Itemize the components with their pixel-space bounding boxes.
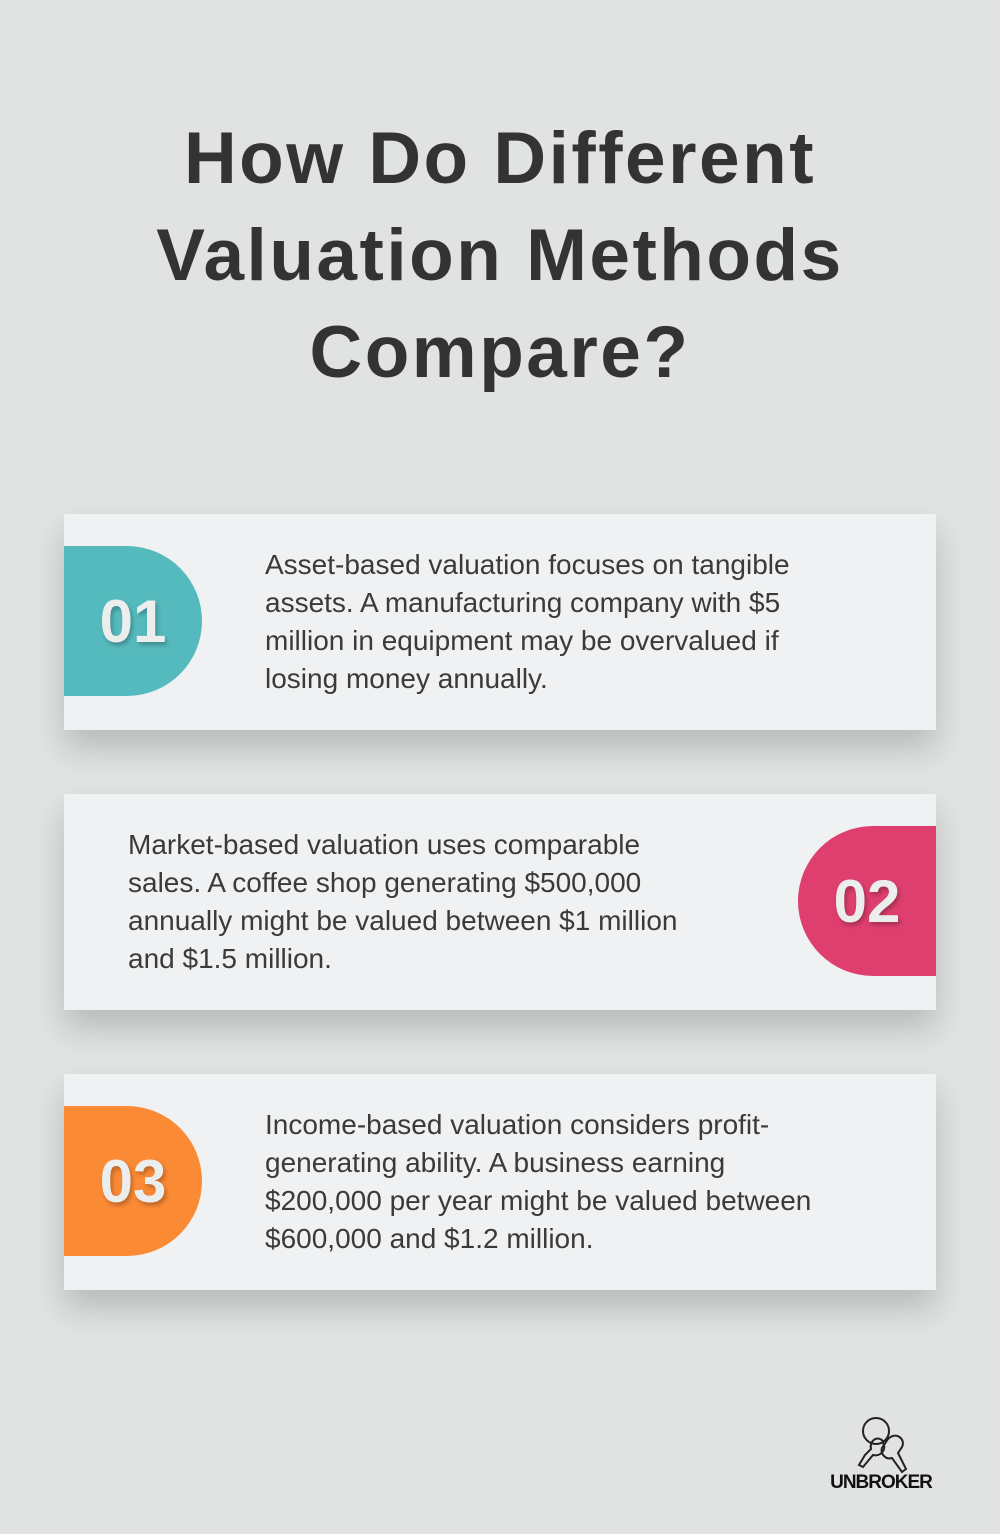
title: [156, 118, 844, 393]
icon: keys: [858, 1417, 908, 1474]
text 03: [265, 1109, 811, 1254]
badge 03: 03: [100, 1148, 166, 1214]
panel: card 02: [64, 794, 936, 1010]
panel: card 03: [64, 1074, 936, 1290]
text 01: [265, 549, 790, 694]
text 01: million in equipment may be overvalued if: [265, 625, 779, 656]
text 02: Market-based valuation uses comparable: [128, 829, 640, 860]
text 01: losing money annually.: [265, 663, 548, 694]
panel: card 01: [64, 514, 936, 730]
logo: [830, 1417, 932, 1493]
badge 01: [64, 546, 202, 696]
text 01: assets. A manufacturing company with $5: [265, 587, 780, 618]
badge 01: 01: [100, 588, 166, 654]
text 02: sales. A coffee shop generating $500,000: [128, 867, 641, 898]
text 02: and $1.5 million.: [128, 943, 332, 974]
title: Valuation Methods: [156, 215, 844, 296]
text 02: [128, 829, 677, 974]
badge 03: [64, 1106, 202, 1256]
text 03: $600,000 and $1.2 million.: [265, 1223, 593, 1254]
text 02: annually might be valued between $1 million: [128, 905, 677, 936]
text 03: Income-based valuation considers profit-: [265, 1109, 769, 1140]
text 03: $200,000 per year might be valued between: [265, 1185, 811, 1216]
brand name: UNBROKER: [830, 1472, 932, 1493]
text 03: generating ability. A business earning: [265, 1147, 725, 1178]
title: How Do Different: [184, 118, 816, 199]
badge 02: [798, 826, 936, 976]
badge 02: 02: [834, 868, 900, 934]
text 01: Asset-based valuation focuses on tangible: [265, 549, 790, 580]
title: Compare?: [309, 312, 690, 393]
